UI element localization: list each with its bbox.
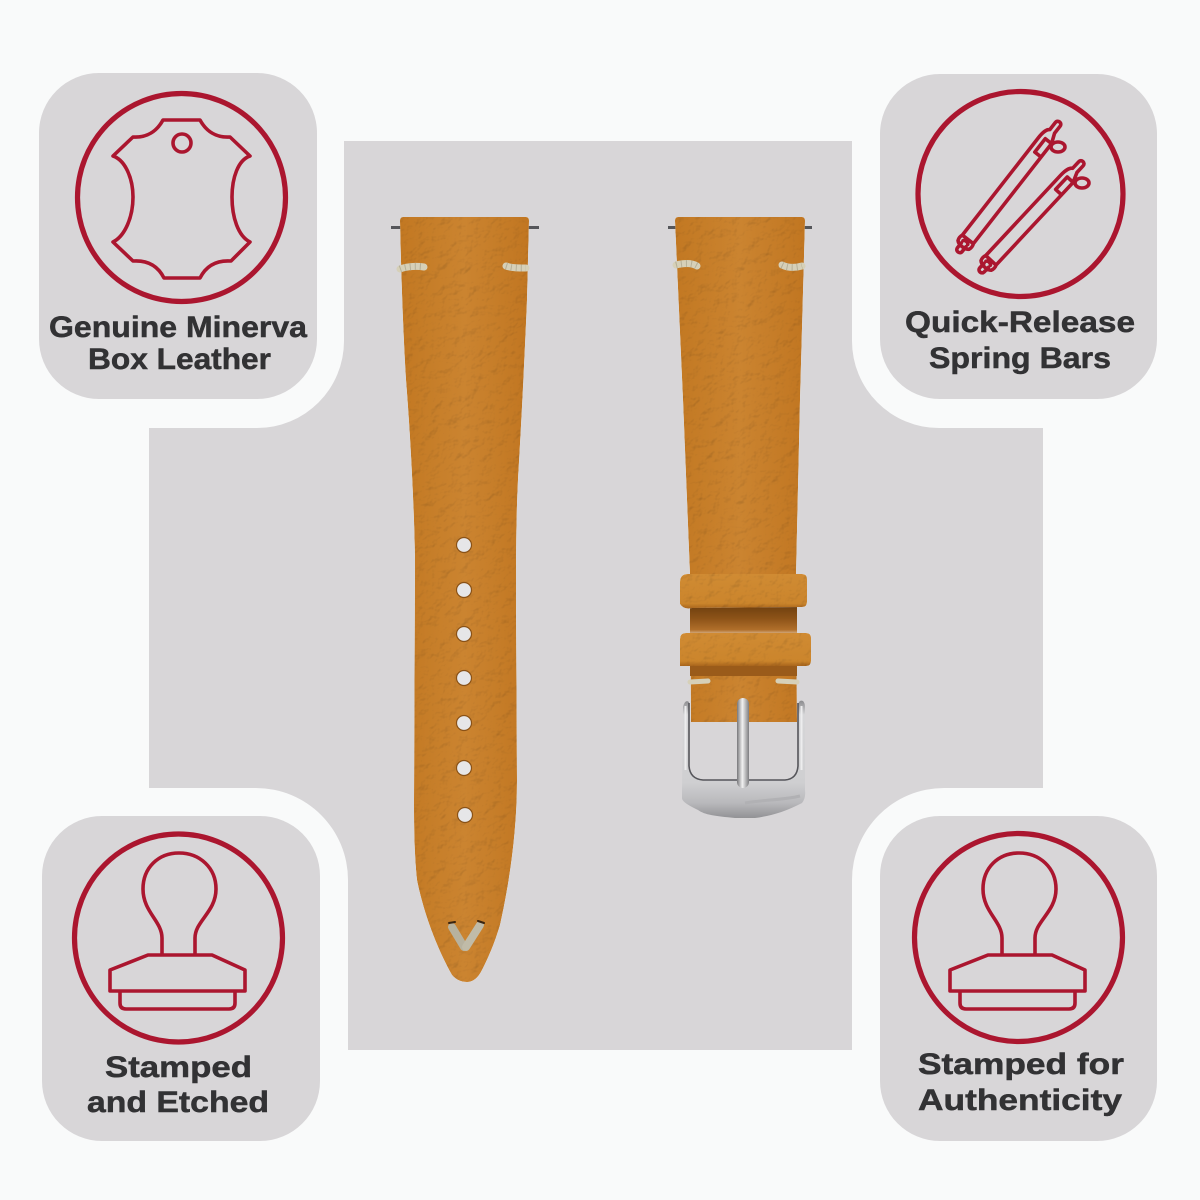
label: genuine leather	[49, 311, 307, 376]
label: stamped and etched: Stamped	[105, 1051, 252, 1084]
long watch strap	[391, 217, 539, 982]
halo: top right	[852, 45, 1184, 428]
stitching	[400, 266, 526, 947]
panel: spring bars	[880, 74, 1157, 399]
label: stamped and etched: and Etched	[87, 1086, 269, 1119]
buckle	[682, 698, 805, 818]
buckle strap	[668, 217, 812, 818]
halo: top left	[10, 45, 344, 428]
label: stamped and etched	[87, 1051, 269, 1119]
strap holes	[456, 538, 472, 822]
keeper loop one	[680, 574, 807, 608]
label: genuine leather: Box Leather	[88, 343, 271, 376]
icon: authenticity stamp	[914, 834, 1122, 1042]
icon: leather hide	[78, 94, 286, 302]
keeper gap shadow	[690, 606, 797, 634]
central grey cross panel	[149, 141, 1043, 1050]
keeper loop two	[680, 633, 811, 666]
icon: stamp	[74, 834, 282, 1042]
panel: genuine leather	[39, 73, 317, 399]
spring bar two	[974, 156, 1089, 277]
label: stamped for authenticity: Stamped for	[918, 1048, 1124, 1081]
icon: quick-release spring bars	[918, 92, 1123, 296]
label: spring bars: Quick-Release	[905, 306, 1135, 339]
label: spring bars: Spring Bars	[929, 342, 1111, 375]
label: genuine leather: Genuine Minerva	[49, 311, 307, 344]
lower keeper shadow	[690, 666, 797, 676]
halo: bottom right	[852, 788, 1184, 1168]
label: stamped for authenticity	[918, 1048, 1124, 1117]
spring bar one	[952, 117, 1066, 257]
panel: stamped and etched	[42, 816, 320, 1141]
panel: stamped for authenticity	[880, 816, 1157, 1141]
label: stamped for authenticity: Authenticity	[918, 1084, 1122, 1117]
buckle stitching	[676, 264, 802, 682]
halo: bottom left	[12, 788, 348, 1168]
label: spring bars	[905, 306, 1135, 375]
